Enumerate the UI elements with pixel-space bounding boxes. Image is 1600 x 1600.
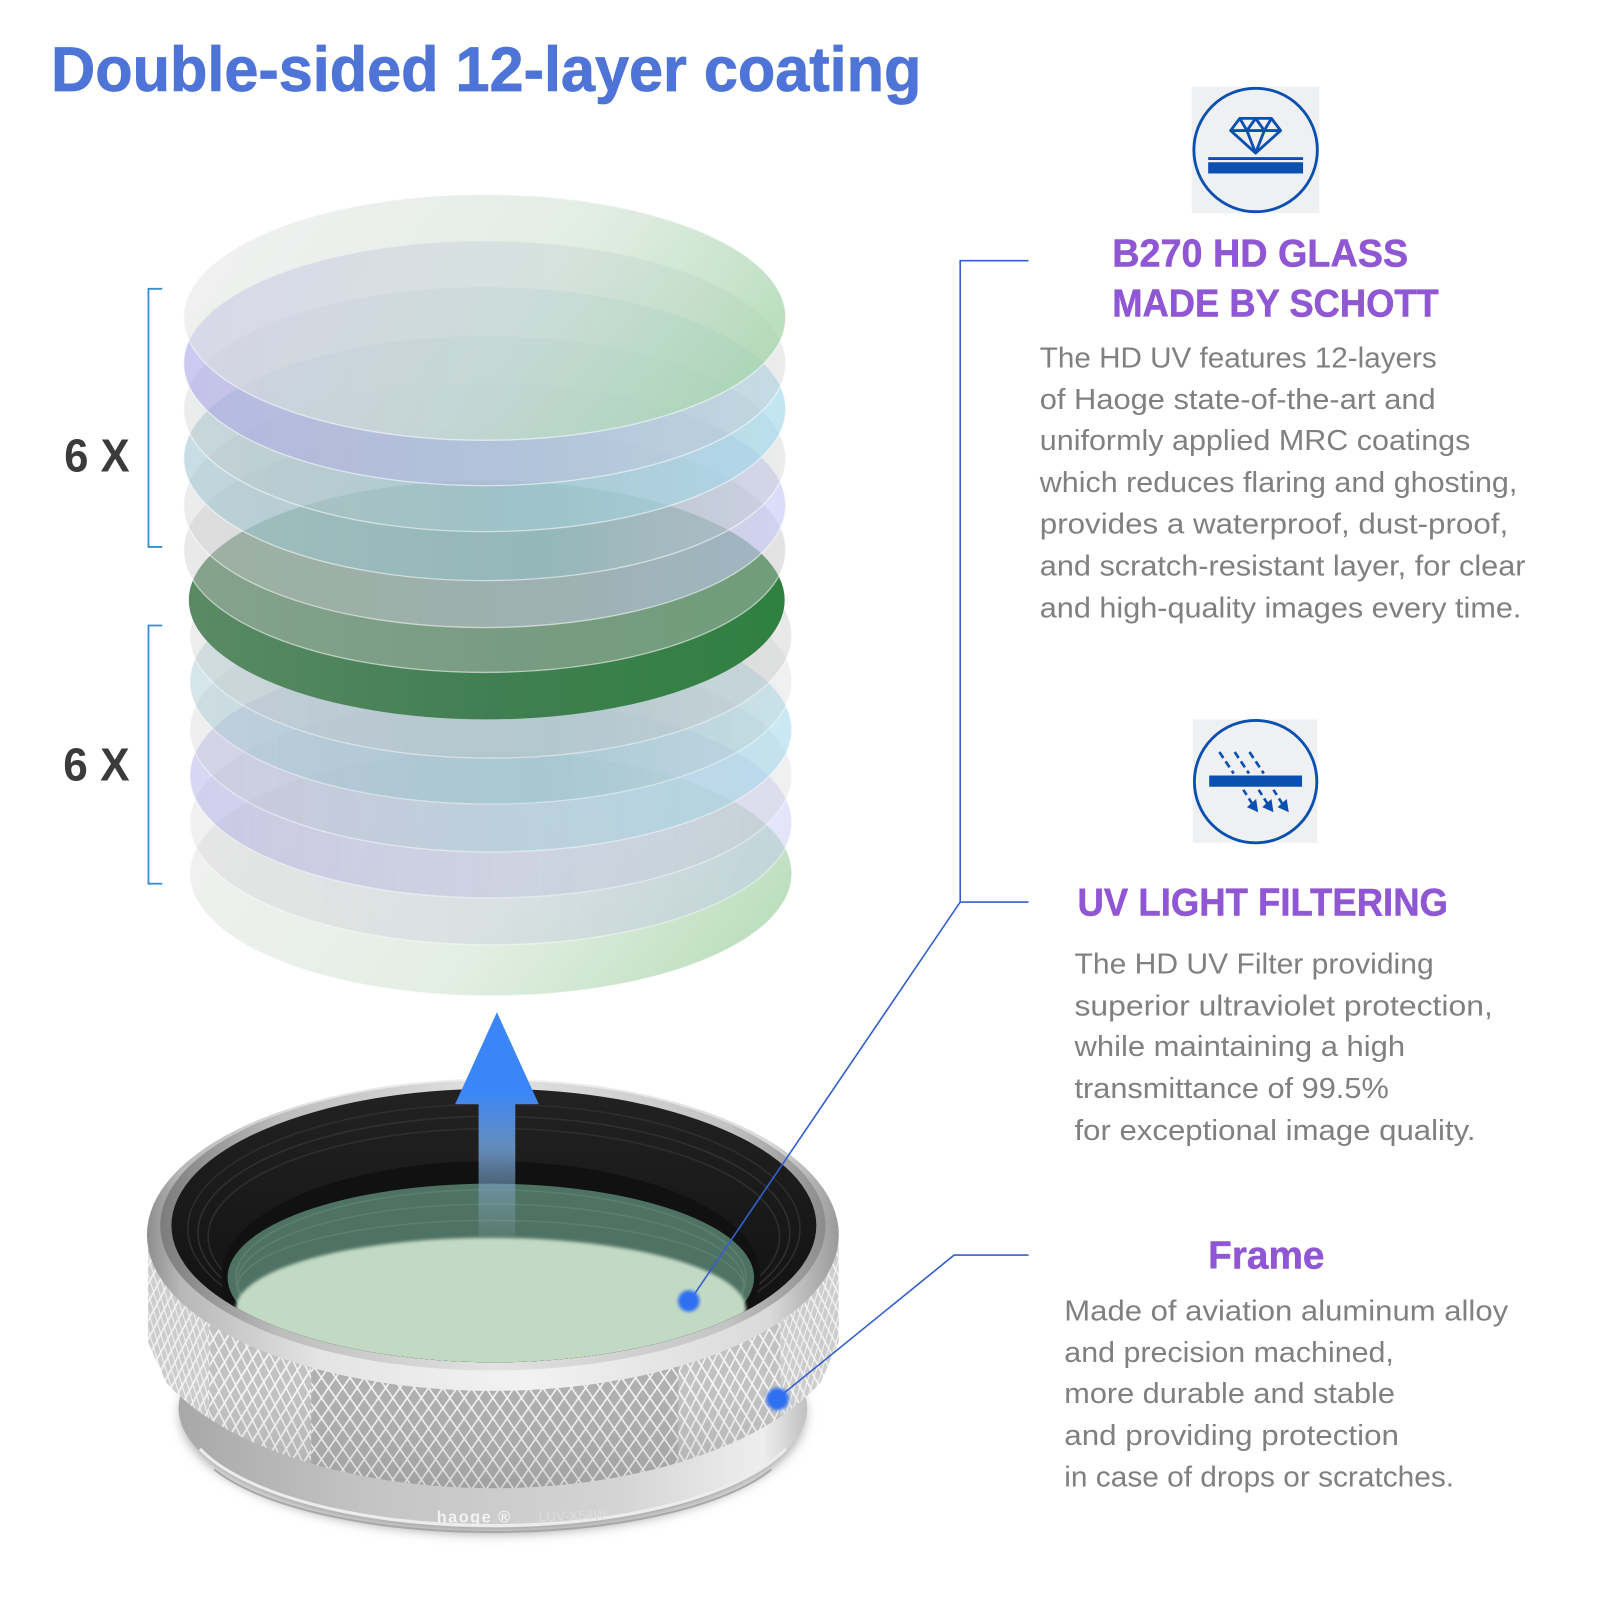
description: more durable and stable [1064, 1378, 1395, 1410]
description: provides a waterproof, dust-proof, [1040, 509, 1508, 541]
icon: UV light through filter [1193, 719, 1317, 843]
heading [1112, 232, 1439, 325]
description: in case of drops or scratches. [1064, 1462, 1454, 1494]
description [1039, 342, 1526, 624]
description: and providing protection [1064, 1420, 1399, 1452]
front rim [147, 1079, 839, 1391]
heading: MADE BY SCHOTT [1112, 282, 1439, 325]
description: which reduces flaring and ghosting, [1039, 467, 1517, 499]
label: upper 6 X: 6 X [64, 429, 130, 481]
title: Double-sided 12-layer coating [51, 35, 921, 105]
callout dot: frame [766, 1388, 789, 1410]
description: uniformly applied MRC coatings [1040, 425, 1470, 457]
description: of Haoge state-of-the-art and [1040, 384, 1436, 416]
heading: UV LIGHT FILTERING [1078, 881, 1448, 924]
heading: Frame [1208, 1234, 1324, 1277]
bracket: upper layers [148, 289, 162, 547]
base ring [179, 1289, 807, 1532]
description: superior ultraviolet protection, [1074, 990, 1493, 1022]
callout dot: glass [678, 1290, 699, 1312]
filter glass [188, 1104, 800, 1390]
coating layer stack [184, 194, 792, 996]
description: while maintaining a high [1073, 1031, 1405, 1063]
icon: diamond on glass [1192, 87, 1319, 213]
label: lower 6 X: 6 X [63, 739, 130, 791]
description: and scratch-resistant layer, for clear [1040, 551, 1526, 583]
description: Made of aviation aluminum alloy [1064, 1295, 1509, 1327]
description: and high-quality images every time. [1040, 592, 1521, 624]
panel: B270 HD glass [1039, 232, 1526, 624]
panel: UV light filtering [1073, 881, 1493, 1147]
callout line: frame [781, 1255, 1029, 1396]
panel: frame [1064, 1234, 1509, 1494]
bracket: lower layers [148, 626, 162, 884]
inner barrel [171, 1089, 816, 1362]
description: for exceptional image quality. [1074, 1115, 1476, 1147]
description [1064, 1295, 1509, 1494]
description [1073, 948, 1493, 1147]
description: The HD UV features 12-layers [1040, 342, 1437, 374]
lens filter product [147, 1079, 842, 1533]
model marking: LUV-X54W [538, 1507, 607, 1524]
upward arrow [455, 1012, 539, 1237]
description: and precision machined, [1064, 1337, 1394, 1369]
rim top edge [160, 1081, 826, 1370]
callout lines: glass [692, 261, 1029, 1298]
heading: B270 HD GLASS [1112, 232, 1408, 275]
description: transmittance of 99.5% [1074, 1073, 1389, 1105]
drop shadow [182, 1296, 804, 1533]
description: The HD UV Filter providing [1074, 948, 1434, 980]
knurled body [148, 1214, 842, 1500]
brand marking: haoge ® [437, 1508, 510, 1526]
